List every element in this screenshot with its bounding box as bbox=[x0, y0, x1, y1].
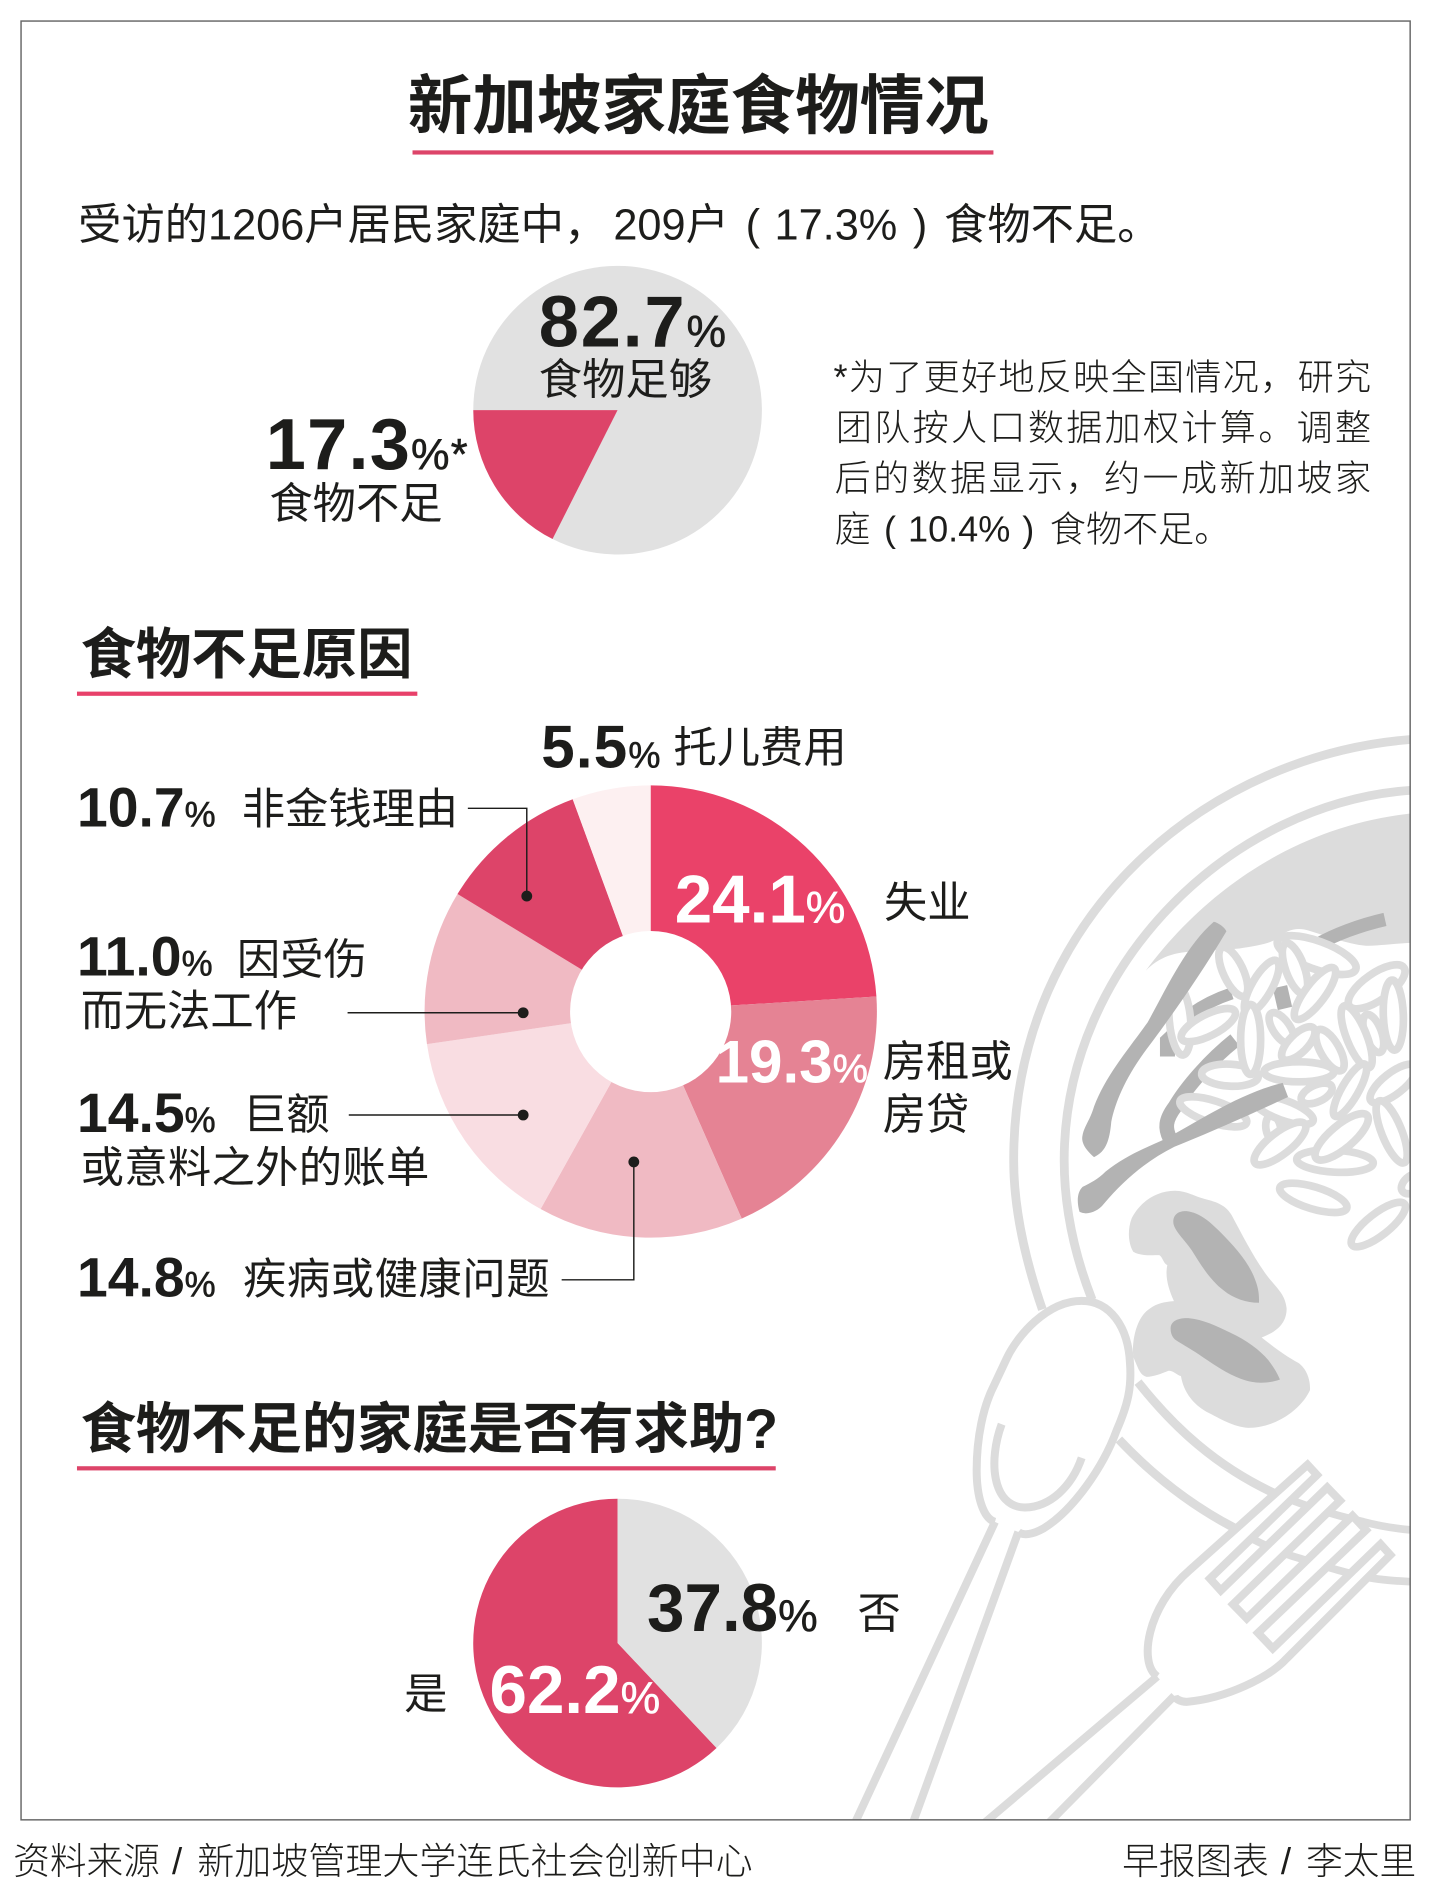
label: 10.7% non-financial: 非金钱理由 bbox=[242, 786, 458, 834]
label: 82.7% sufficient bbox=[539, 282, 728, 405]
fork bbox=[970, 1465, 1413, 1835]
label: 14.8% illness: 14.8% bbox=[77, 1247, 216, 1309]
label: 11.0% injury: 11.0% bbox=[77, 925, 213, 987]
leader: 11.0% bbox=[348, 1007, 529, 1018]
label: 11.0% injury: 而无法工作 bbox=[81, 988, 297, 1036]
intro sentence: ) bbox=[913, 201, 927, 249]
label: 82.7% sufficient: 82.7% bbox=[539, 282, 728, 362]
leader: 14.5% bbox=[349, 1110, 529, 1120]
spoon bbox=[850, 1301, 1130, 1834]
illustration: plate of rice with spoon and fork bbox=[850, 739, 1429, 1835]
source credit: 资料来源 bbox=[13, 1841, 160, 1882]
label: 5.5% childcare: 5.5% bbox=[541, 713, 662, 780]
weighted data note: 10.4% bbox=[908, 508, 1010, 549]
label: 19.3% rent or mortgage: 房租或 bbox=[883, 1039, 1013, 1087]
heading: seeking help: 食物不足的家庭是否有求助? bbox=[81, 1398, 778, 1460]
label: 17.3% insufficient: 17.3%* bbox=[266, 405, 469, 485]
leader: 10.7% bbox=[468, 808, 532, 902]
label: 37.8% no: 否 bbox=[858, 1591, 901, 1639]
graphic credit: 早报图表 bbox=[1122, 1841, 1269, 1882]
source credit: / bbox=[172, 1841, 183, 1882]
label: 14.5% large bills: 或意料之外的账单 bbox=[81, 1144, 429, 1192]
label: 14.8% illness: 疾病或健康问题 bbox=[243, 1256, 550, 1304]
label: 11.0% injury bbox=[77, 925, 367, 1036]
label: 14.5% large bills: 14.5% bbox=[77, 1082, 216, 1144]
intro sentence: ( bbox=[746, 201, 761, 249]
title: 新加坡家庭食物情况 bbox=[408, 71, 989, 143]
label: 14.8% illness bbox=[77, 1247, 550, 1309]
title underline bbox=[413, 150, 993, 155]
graphic credit: / bbox=[1281, 1841, 1292, 1882]
label: 10.7% non-financial: 10.7% bbox=[77, 776, 216, 838]
label: 19.3% rent or mortgage: 19.3% bbox=[716, 1029, 868, 1096]
heading: reasons: 食物不足原因 bbox=[81, 624, 412, 686]
label: 14.5% large bills bbox=[77, 1082, 429, 1192]
source credit: 新加坡管理大学连氏社会创新中心 bbox=[197, 1840, 753, 1882]
weighted data note: ) bbox=[1022, 508, 1034, 549]
label: 82.7% sufficient: 食物足够 bbox=[539, 357, 712, 405]
leader: 14.8% bbox=[562, 1156, 639, 1280]
intro sentence: 受访的1206户居民家庭中， bbox=[78, 201, 607, 249]
label: 5.5% childcare: 托儿费用 bbox=[674, 725, 847, 773]
weighted data note: *为了更好地反映全国情况，研究 bbox=[833, 357, 1371, 398]
label: 10.7% non-financial bbox=[77, 776, 458, 838]
label: 17.3% insufficient bbox=[266, 405, 469, 528]
label: 14.5% large bills: 巨额 bbox=[243, 1091, 330, 1139]
intro sentence: 209户 bbox=[613, 201, 729, 249]
pie chart: sought help bbox=[473, 1499, 762, 1787]
label: 24.1% unemployment: 24.1% bbox=[675, 863, 845, 938]
pie chart: food sufficiency bbox=[473, 266, 762, 555]
label: 19.3% rent or mortgage bbox=[716, 1029, 1013, 1139]
label: 11.0% injury: 因受伤 bbox=[237, 936, 367, 984]
weighted data note: 后的数据显示，约一成新加坡家 bbox=[835, 458, 1371, 499]
label: 24.1% unemployment bbox=[675, 863, 971, 938]
label: 37.8% no: 37.8% bbox=[647, 1571, 818, 1646]
heading underline bbox=[77, 1466, 776, 1470]
weighted data note bbox=[833, 357, 1371, 549]
label: 62.2% yes: 62.2% bbox=[489, 1653, 660, 1728]
weighted data note: 团队按人口数据加权计算。调整 bbox=[836, 407, 1371, 448]
intro sentence: 食物不足。 bbox=[944, 201, 1161, 249]
label: 37.8% no bbox=[647, 1571, 901, 1646]
label: 17.3% insufficient: 食物不足 bbox=[269, 480, 443, 528]
donut chart: reasons bbox=[425, 785, 877, 1238]
weighted data note: 庭 bbox=[835, 508, 871, 549]
weighted data note: ( bbox=[884, 508, 896, 549]
weighted data note: 食物不足。 bbox=[1050, 508, 1230, 549]
label: 5.5% childcare bbox=[541, 713, 847, 780]
label: 62.2% yes bbox=[404, 1653, 660, 1728]
graphic credit: 李太里 bbox=[1306, 1841, 1416, 1882]
label: 19.3% rent or mortgage: 房贷 bbox=[883, 1091, 969, 1139]
label: 24.1% unemployment: 失业 bbox=[884, 880, 971, 928]
intro sentence: 17.3% bbox=[775, 201, 897, 249]
label: 62.2% yes: 是 bbox=[404, 1671, 447, 1719]
heading underline bbox=[77, 692, 417, 696]
